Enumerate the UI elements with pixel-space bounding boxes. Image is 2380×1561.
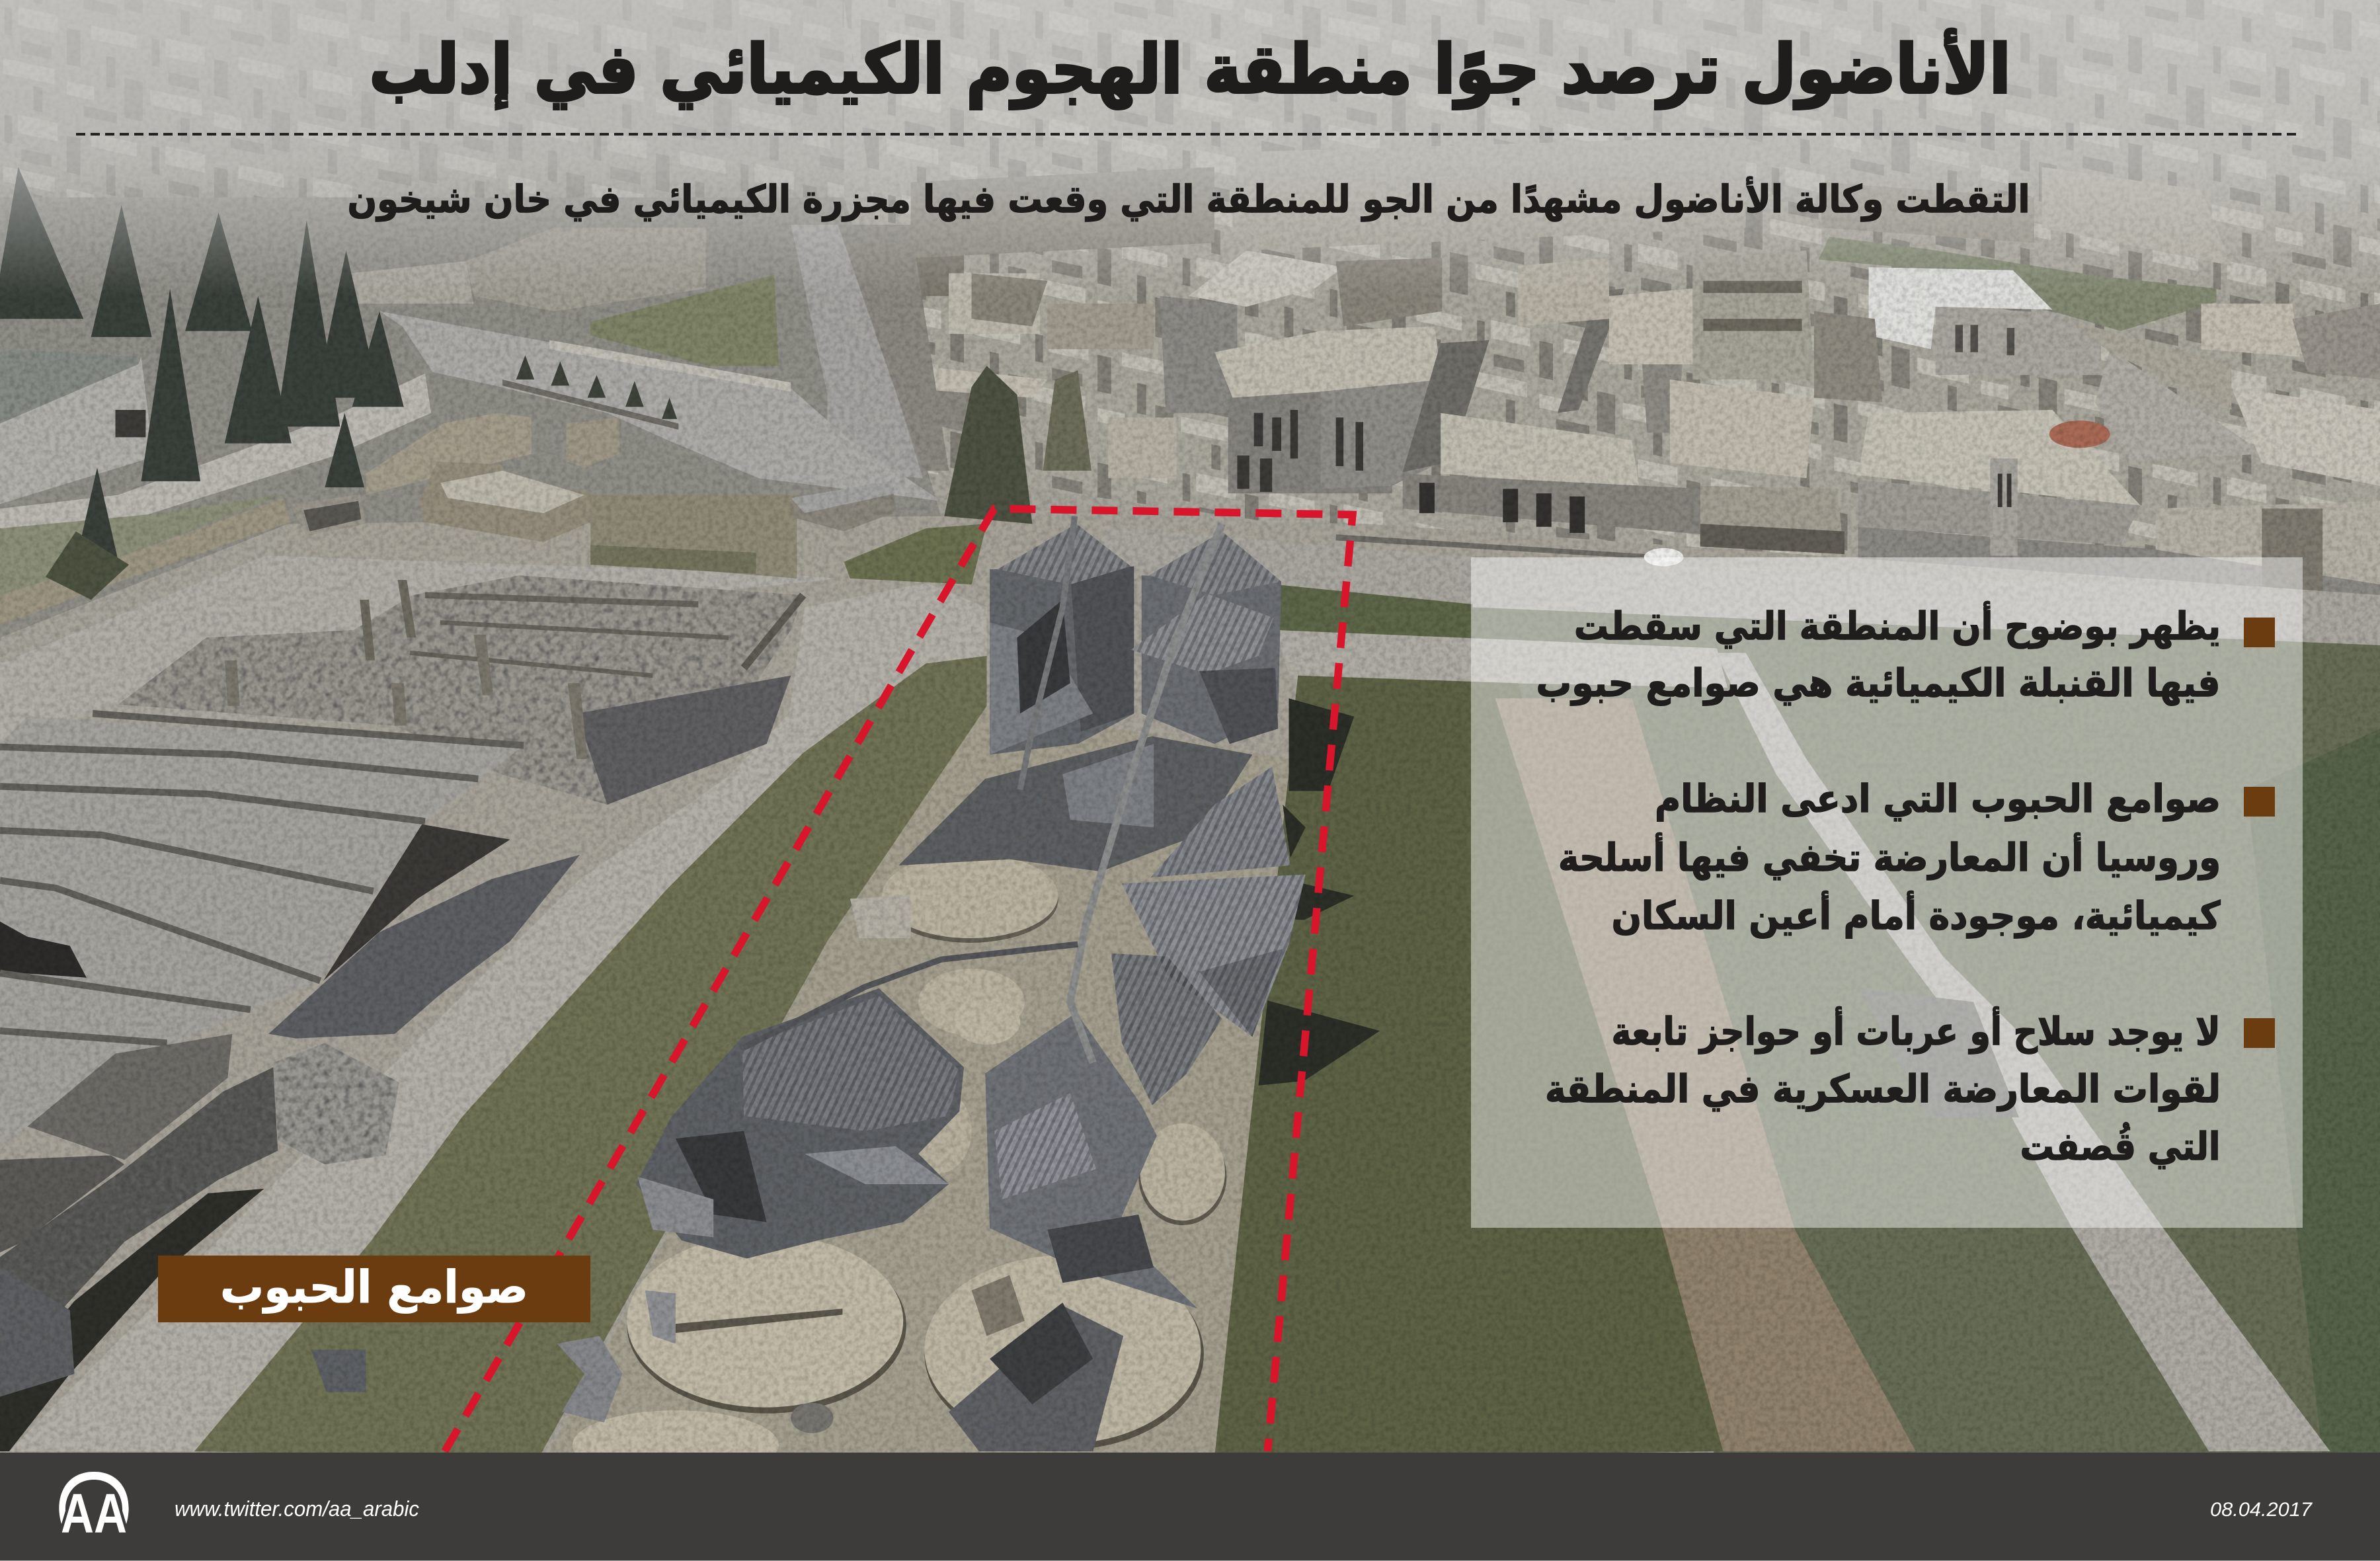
footer bar (0, 1453, 2380, 1561)
icon: AA logo: AA (61, 1482, 127, 1544)
standing silo A (990, 524, 1134, 754)
red dashed outline around silos (445, 508, 1353, 1451)
subtitle: التقطت وكالة الأناضول مشهدًا من الجو للمنطقة التي وقعت فيها مجزرة الكيميائي في خان شيخون (348, 177, 2030, 221)
crushed silo F (985, 1013, 1198, 1308)
label: grain silos (158, 1256, 590, 1322)
bullet 1: فيها القنبلة الكيميائية هي صوامع حبوب (1536, 660, 2220, 706)
damaged grain silos (636, 516, 1306, 1451)
conveyor tower (1070, 524, 1222, 1062)
bullet 3 (1545, 1006, 2275, 1169)
ground: roads, fields and path (0, 516, 2380, 1457)
dashed divider (76, 133, 2297, 136)
bullet 2: كيميائية، موجودة أمام أعين السكان (1612, 891, 2221, 939)
crushed silo D (1122, 875, 1306, 1037)
label: grain silos: صوامع الحبوب (220, 1261, 528, 1314)
bullet 2: وروسيا أن المعارضة تخفي فيها أسلحة (1558, 832, 2221, 881)
concrete silo pad (547, 706, 1290, 1457)
bullet 3: لا يوجد سلاح أو عربات أو حواجز تابعة (1612, 1006, 2220, 1055)
date: 08.04.2017 (2210, 1499, 2313, 1521)
rubble field with posts (118, 575, 803, 805)
corrugation texture on silo panels (742, 524, 1306, 1199)
crushed silo G (636, 988, 964, 1259)
bullet 1 (1536, 601, 2275, 706)
bottom left shadow and debris (0, 1189, 264, 1451)
town buildings (0, 0, 2380, 600)
collapsed hall roofs on the left (0, 713, 580, 1392)
bullet 2: صوامع الحبوب التي ادعى النظام (1655, 776, 2221, 822)
crushed silo C (1151, 767, 1290, 877)
crushed silo E (1111, 953, 1222, 1105)
bullet 2 (1558, 776, 2275, 939)
bullet 3: التي قُصفت (2020, 1123, 2220, 1169)
far hillside and green slopes (2034, 0, 2380, 182)
shadows of the silos on the grass (1259, 698, 1380, 1086)
concrete silo foundations (557, 853, 1226, 1480)
left side: streets, walls, trees and small buildings (0, 167, 1091, 637)
bullet 3: لقوات المعارضة العسكرية في المنطقة (1545, 1066, 2221, 1112)
bullet 1: يظهر بوضوح أن المنطقة التي سقطت (1574, 601, 2221, 649)
debris between silos (898, 737, 1252, 871)
lower debris (949, 1306, 1123, 1451)
top haze (0, 0, 2380, 296)
panel: key findings (1471, 557, 2303, 1228)
twitter address: www.twitter.com/aa_arabic (175, 1497, 419, 1521)
title: الأناضول ترصد جوًا منطقة الهجوم الكيميائي في إدلب (369, 28, 2011, 110)
standing silo B (1131, 532, 1281, 744)
